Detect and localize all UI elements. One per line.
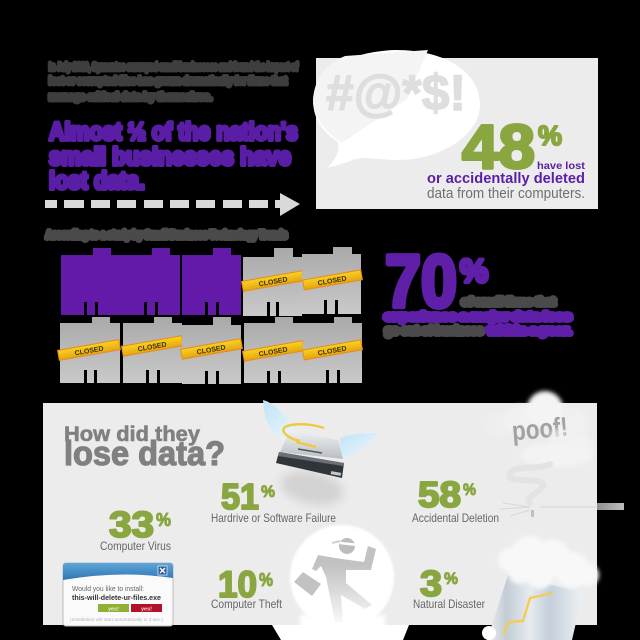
70 percent caption: within a year. — [487, 325, 571, 337]
icon: virus popup window: yes! — [141, 606, 152, 612]
stat: 58 percent — [412, 474, 499, 525]
icon: virus popup window: (Installation will start automatically in 3 sec.) — [70, 617, 163, 623]
heading: lose data? — [64, 435, 225, 473]
chart: ten buildings — [58, 247, 362, 384]
big number 70%: 70 — [385, 240, 457, 323]
stat: 33 percent: % — [156, 510, 171, 530]
building 7 closed: CLOSED — [137, 341, 167, 353]
icon: storm cloud — [482, 536, 599, 640]
intro paragraph: lost or corrupted files has grown dramatically for firms that — [49, 76, 288, 87]
70 percent caption: of small firms that — [462, 297, 556, 308]
70 percent caption: experience a major data loss — [385, 311, 571, 323]
caption — [427, 160, 586, 202]
stat: 33 percent — [100, 504, 171, 553]
building 8 closed: CLOSED — [196, 344, 226, 356]
icon: winged hard drive — [263, 400, 378, 510]
building 6 closed — [58, 317, 120, 383]
70 percent caption: go out of business — [385, 325, 483, 337]
building 9 closed: CLOSED — [258, 346, 288, 358]
icon: virus popup window: yes! — [108, 606, 119, 612]
dashed arrow — [45, 193, 300, 216]
headline: small businesses have — [49, 143, 291, 171]
intro paragraph: In July 2010, Symantec surveyed small businesses and found the impact of — [49, 62, 298, 73]
icon: virus popup window: this-will-delete-ur-files.exe — [72, 593, 161, 602]
stat: 58 percent: % — [463, 480, 476, 499]
building 4 closed — [242, 248, 304, 316]
building 9 closed — [243, 317, 304, 383]
building 4 closed: CLOSED — [258, 276, 288, 288]
icon: virus popup window — [63, 563, 173, 626]
intro paragraph — [49, 62, 298, 103]
stat: 10 percent: Computer Theft — [211, 597, 283, 611]
icon: poof cloud: poof! — [511, 412, 569, 446]
stat: 3 percent: Natural Disaster — [413, 597, 485, 611]
stat: 51 percent: Hardrive or Software Failure — [211, 511, 336, 525]
stat: 33 percent: 33 — [109, 504, 154, 545]
icon: speech bubble — [313, 50, 480, 168]
big number 48% — [462, 113, 562, 182]
stat: 3 percent: 3 — [420, 563, 442, 604]
big number 70%: % — [460, 253, 488, 289]
icon: virus popup window: Would you like to install: — [72, 584, 144, 593]
panel: 48 percent — [313, 50, 598, 209]
caption: or accidentally deleted — [427, 171, 585, 187]
stat: 51 percent — [211, 476, 336, 525]
stat: 10 percent: 10 — [218, 564, 257, 605]
big number 48%: 48 — [462, 113, 535, 182]
stat: 58 percent: Accidental Deletion — [412, 511, 499, 525]
intro paragraph: manage critical data by themselves. — [49, 92, 212, 103]
building 3 open — [182, 248, 241, 315]
stat: 33 percent: Computer Virus — [100, 539, 171, 553]
heading: How did they — [64, 423, 200, 446]
stat: 51 percent: % — [261, 482, 275, 501]
stat: 3 percent — [413, 563, 485, 611]
headline: Almost ½ of the nation's — [49, 118, 298, 146]
caption: data from their computers. — [427, 186, 585, 202]
building 1 open — [61, 248, 120, 315]
stat: 51 percent: 51 — [221, 476, 259, 517]
stat: 10 percent — [211, 564, 283, 611]
caption: have lost — [537, 160, 586, 172]
panel: how did they lose data — [43, 391, 624, 640]
icon: speech bubble: #@*$! — [326, 65, 466, 121]
building 10 closed — [303, 317, 362, 383]
icon: running thief — [272, 525, 409, 640]
stat: 58 percent: 58 — [418, 474, 461, 515]
headline — [49, 118, 298, 195]
study caption: According to a study by Small Business Technology Trends — [46, 230, 287, 241]
building 5 closed: CLOSED — [317, 275, 347, 287]
icon: poof cloud — [486, 391, 596, 517]
big number 48%: % — [538, 120, 562, 151]
stray bar beside panel — [597, 503, 624, 510]
building 8 closed — [181, 317, 242, 384]
building 2 open — [120, 248, 180, 315]
stat: 10 percent: % — [259, 570, 273, 590]
70 percent caption — [385, 297, 571, 337]
building 7 closed — [122, 317, 183, 383]
headline: lost data. — [49, 167, 145, 195]
building 6 closed: CLOSED — [74, 345, 104, 357]
building 10 closed: CLOSED — [317, 345, 347, 357]
building 5 closed — [302, 247, 362, 314]
stat: 3 percent: % — [444, 569, 458, 588]
